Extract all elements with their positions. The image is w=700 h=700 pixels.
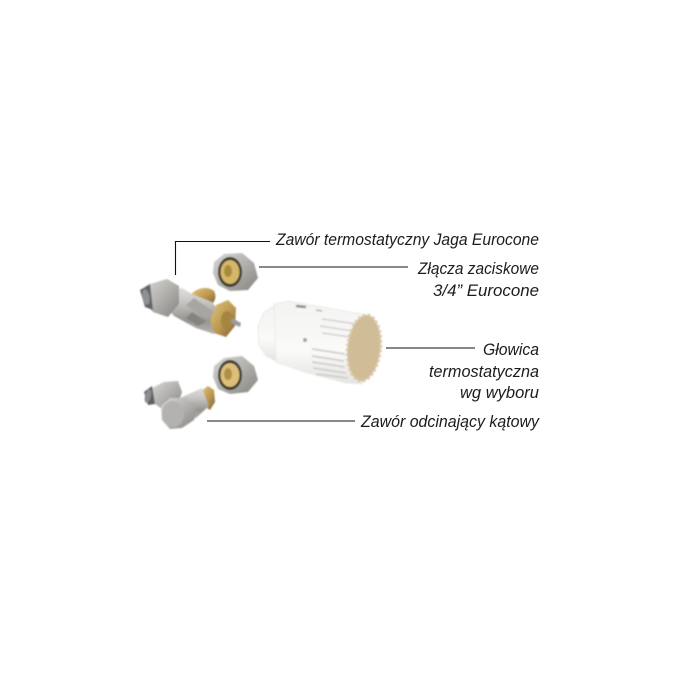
lower ribs xyxy=(312,349,348,378)
label: compression fittings: Złącza zaciskowe xyxy=(417,259,539,278)
label: angle shut-off valve: Zawór odcinający kątowy xyxy=(360,412,540,431)
icon: lower compression nut xyxy=(213,356,258,394)
label: compression fittings xyxy=(417,259,539,300)
label: thermostatic head: wg wyboru xyxy=(460,383,540,402)
leader line: compression fittings xyxy=(259,266,408,268)
label: thermostatic head: Głowica xyxy=(483,340,539,359)
icon: angle shut-off valve xyxy=(143,381,215,429)
label: thermostatic valve: Zawór termostatyczny Jaga Eurocone xyxy=(275,230,539,249)
cream end cap xyxy=(344,313,384,383)
label: thermostatic head xyxy=(429,340,540,402)
icon: upper compression nut xyxy=(213,253,258,291)
leader line: thermostatic valve xyxy=(176,242,270,275)
leader line: thermostatic head xyxy=(386,347,475,349)
icon: thermostatic head xyxy=(258,301,384,384)
head knob xyxy=(258,305,278,362)
label: thermostatic head: termostatyczna xyxy=(429,362,539,381)
leader line: angle shut-off valve xyxy=(207,420,355,422)
upper ribs xyxy=(320,319,356,337)
icon: thermostatic valve xyxy=(140,279,241,337)
head body xyxy=(274,301,378,384)
scale markings xyxy=(296,306,306,307)
label: compression fittings: 3/4” Eurocone xyxy=(433,281,539,300)
